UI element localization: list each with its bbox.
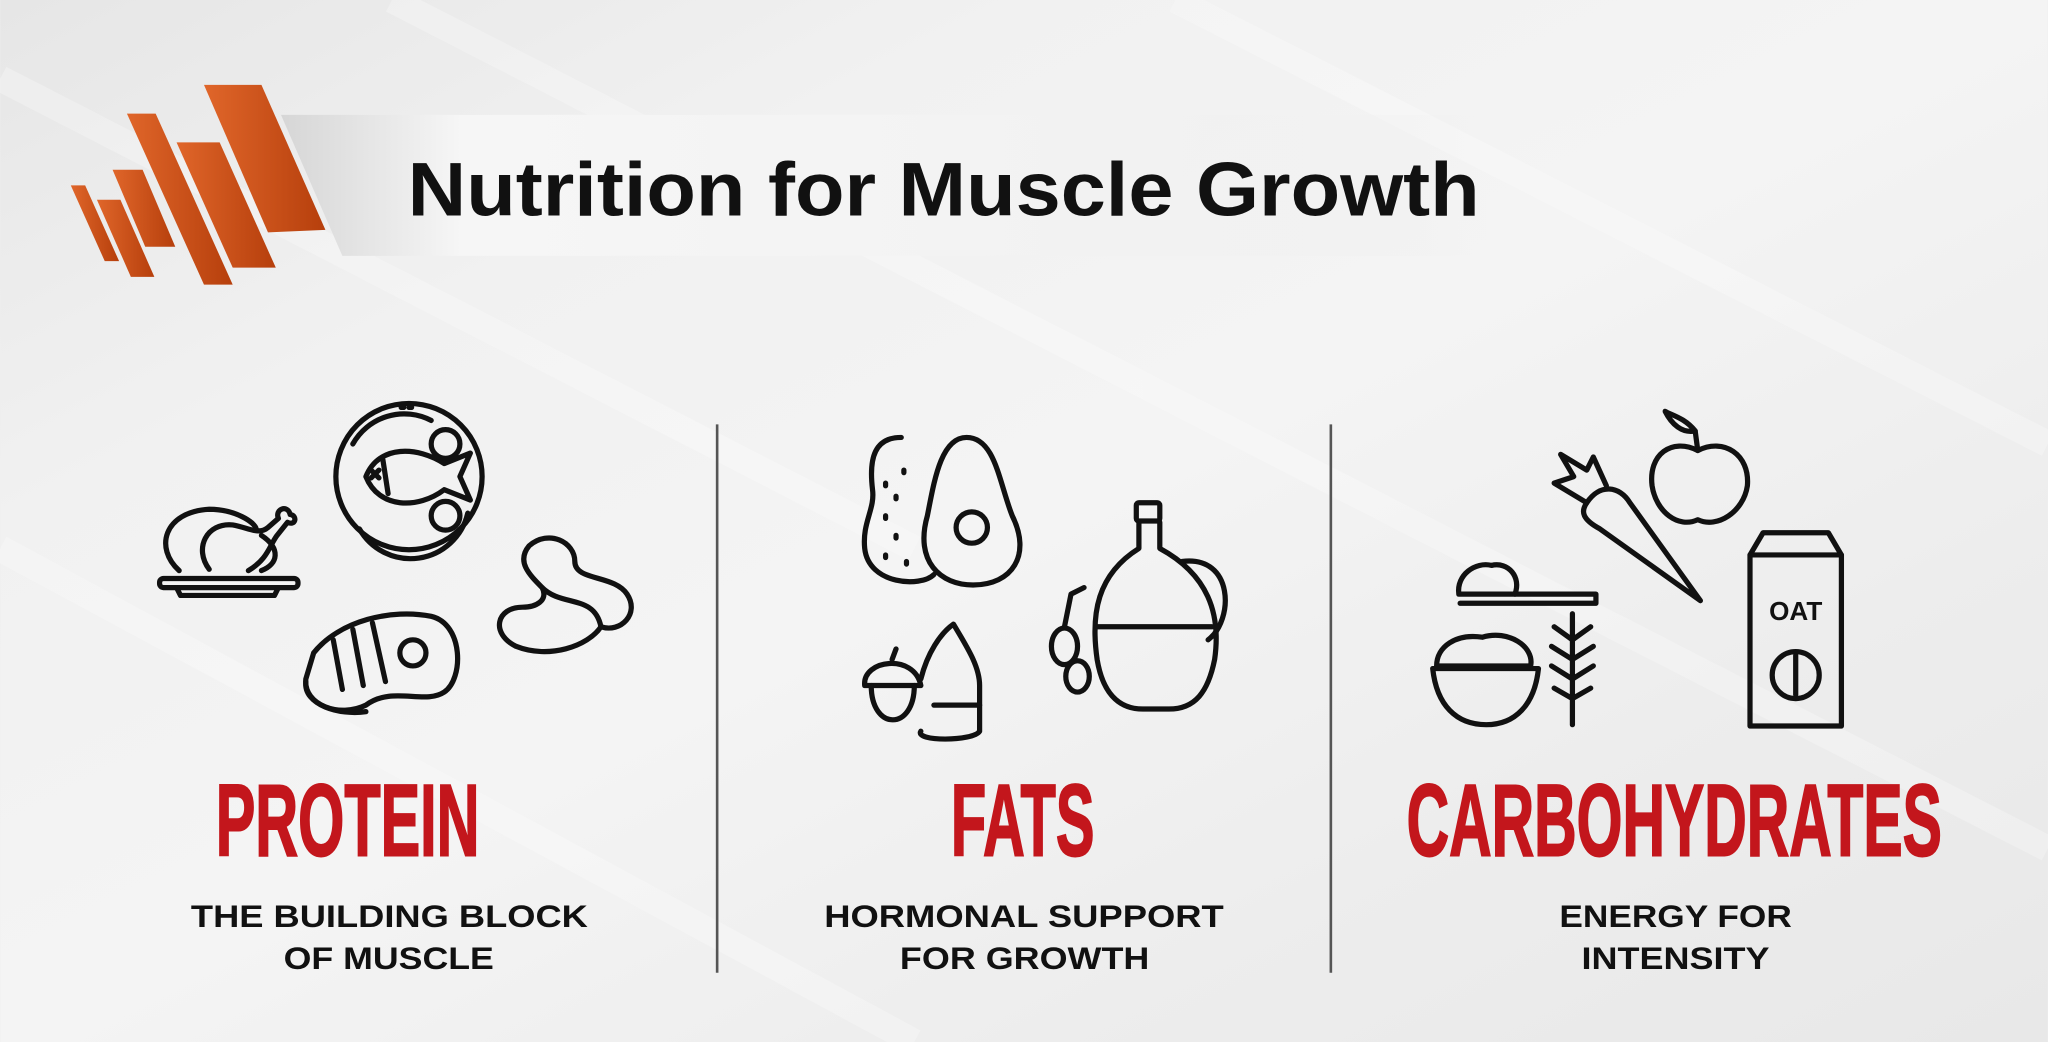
subtitle: carbohydrates: INTENSITY bbox=[1582, 941, 1770, 976]
subtitle: protein: OF MUSCLE bbox=[284, 941, 494, 976]
icon: beans bbox=[499, 538, 631, 652]
icon: spoon bbox=[1459, 565, 1596, 603]
subtitle: fats bbox=[824, 899, 1224, 976]
icon: peanut and avocado bbox=[864, 437, 1020, 585]
subtitle: fats: HORMONAL SUPPORT bbox=[824, 899, 1224, 934]
title banner bbox=[281, 115, 1489, 256]
subtitle: fats: FOR GROWTH bbox=[900, 941, 1149, 976]
subtitle: carbohydrates: ENERGY FOR bbox=[1559, 899, 1792, 934]
icon: carrot bbox=[1554, 454, 1700, 601]
icons: protein bbox=[160, 403, 631, 712]
icon: steak bbox=[306, 614, 458, 712]
heading: protein: PROTEIN bbox=[216, 763, 479, 877]
title: Nutrition for Muscle Growth bbox=[408, 147, 1480, 232]
icon: oil bottle bbox=[1051, 503, 1225, 709]
icon: fish plate bbox=[336, 403, 482, 559]
icon: wheat bbox=[1552, 614, 1593, 725]
icon: apple bbox=[1652, 411, 1748, 522]
icon: bowl bbox=[1433, 635, 1538, 725]
subtitle: protein: THE BUILDING BLOCK bbox=[191, 899, 588, 934]
logo: orange bars bbox=[71, 85, 325, 285]
icon: nuts bbox=[865, 624, 980, 739]
icons: fats bbox=[864, 437, 1225, 739]
subtitle: protein bbox=[191, 899, 588, 976]
icon: oat carton: OAT bbox=[1769, 596, 1822, 626]
icon: roast chicken bbox=[160, 509, 298, 595]
dividers bbox=[717, 424, 1331, 973]
subtitle: carbohydrates bbox=[1559, 899, 1792, 976]
icons: carbohydrates bbox=[1433, 411, 1841, 726]
heading: fats: FATS bbox=[951, 763, 1095, 877]
icon: oat carton bbox=[1750, 533, 1841, 726]
